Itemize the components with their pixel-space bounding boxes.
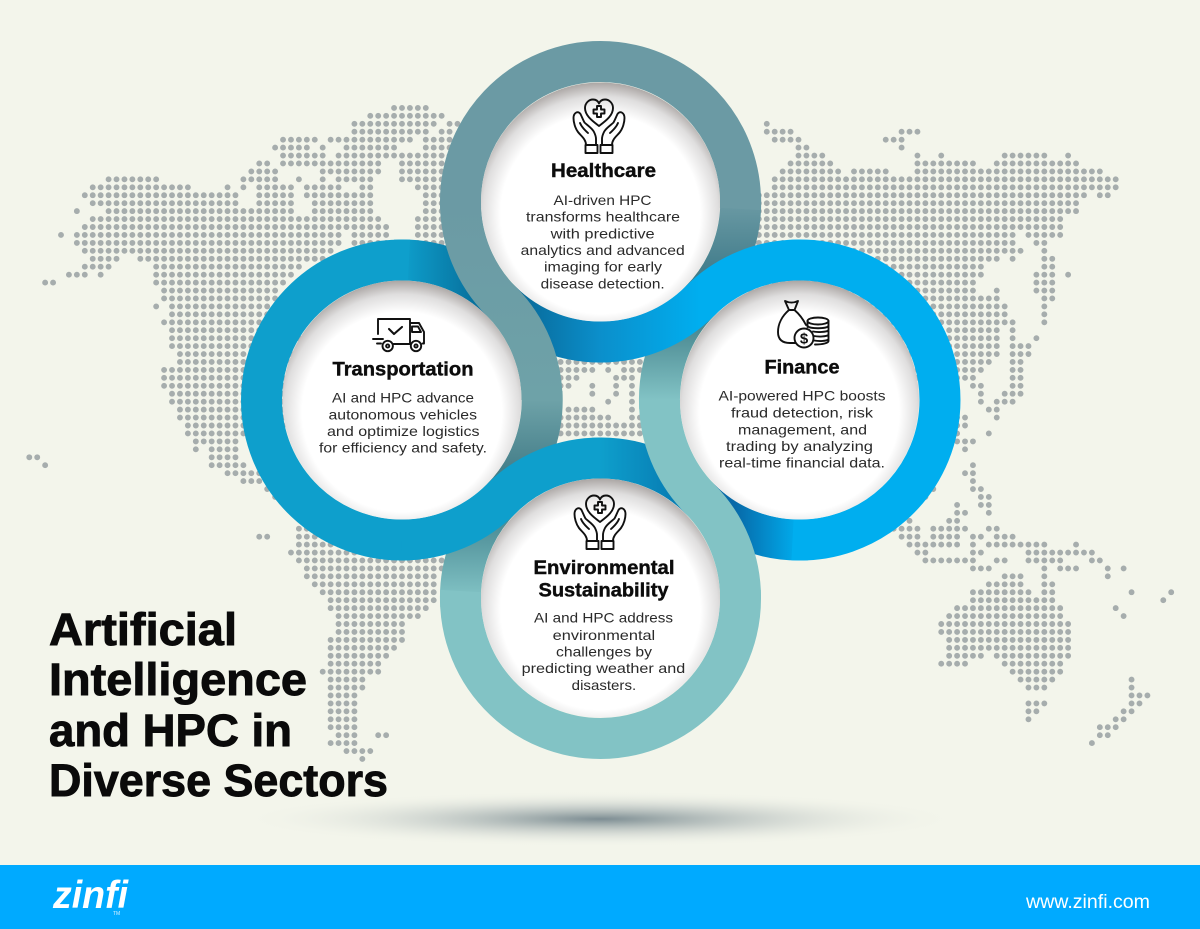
- text block: fraud detection, risk: [731, 404, 874, 420]
- text block: transforms healthcare: [526, 209, 680, 225]
- text block: challenges by: [556, 644, 652, 660]
- text block: [521, 192, 685, 292]
- text block: [319, 390, 487, 456]
- icon: hands holding heart: [574, 100, 624, 153]
- heading: Environmental: [534, 558, 674, 579]
- heading: Sustainability: [538, 580, 669, 602]
- text block: real-time financial data.: [719, 455, 885, 471]
- icon: money bag and coins: [778, 301, 828, 348]
- text block: AI and HPC advance: [332, 390, 474, 406]
- title: and HPC in: [49, 705, 292, 756]
- text block: AI-powered HPC boosts: [718, 388, 886, 404]
- heading: Finance: [764, 357, 840, 378]
- text block: imaging for early: [544, 259, 662, 275]
- icon: delivery truck: [373, 319, 424, 351]
- heading: Transportation: [332, 359, 474, 380]
- text block: management, and: [738, 421, 867, 437]
- title: Artificial: [49, 604, 237, 655]
- title: [49, 604, 388, 806]
- title: Diverse Sectors: [49, 755, 388, 806]
- text block: autonomous vehicles: [328, 406, 477, 422]
- text block: and optimize logistics: [327, 423, 480, 439]
- text block: [522, 610, 685, 693]
- website url: www.zinfi.com: [1025, 891, 1150, 913]
- title: Intelligence: [49, 654, 307, 705]
- dotted world map: [29, 108, 1175, 759]
- logo: zinfi: [52, 874, 129, 917]
- text block: predicting weather and: [522, 660, 685, 676]
- text block: for efficiency and safety.: [319, 440, 487, 456]
- text block: [718, 388, 886, 471]
- text block: AI and HPC address: [534, 610, 673, 626]
- text block: with predictive: [550, 225, 655, 241]
- text block: trading by analyzing: [726, 438, 873, 454]
- text block: AI-driven HPC: [554, 192, 652, 208]
- text block: disasters.: [572, 677, 636, 693]
- panel: environmental sustainability: [481, 478, 720, 718]
- ground shadow: [240, 791, 960, 847]
- text block: environmental: [553, 627, 655, 643]
- interlocking rings: [262, 62, 940, 738]
- text block: analytics and advanced: [521, 242, 685, 258]
- icon: hands holding heart: [574, 496, 626, 549]
- logo: TM: [113, 911, 120, 917]
- heading: [534, 558, 674, 602]
- text block: disease detection.: [541, 276, 665, 292]
- footer bar: [0, 865, 1200, 929]
- panel: healthcare: [481, 82, 720, 322]
- heading: Healthcare: [551, 161, 656, 182]
- panel: finance: [680, 280, 919, 520]
- icon: money bag and coins: $: [800, 330, 809, 348]
- panel: transportation: [282, 280, 522, 520]
